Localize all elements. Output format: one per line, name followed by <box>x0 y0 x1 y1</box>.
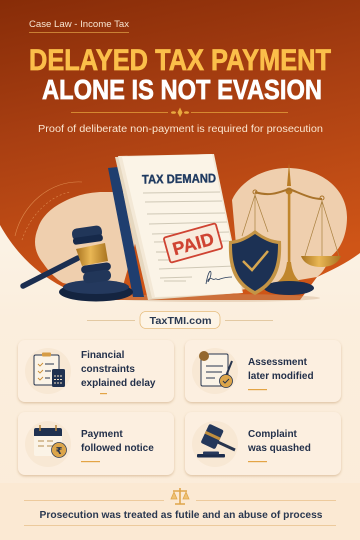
document heading: TAX DEMAND <box>142 171 216 187</box>
signature <box>206 271 232 284</box>
pole and top <box>287 163 291 186</box>
sound block <box>59 282 133 302</box>
illustration: gavel <box>23 225 133 302</box>
background: beige blob behind scales <box>232 168 347 290</box>
illustration: scales <box>242 163 341 295</box>
card: financial constraints <box>18 340 174 402</box>
card: payment followed notice: Payment <box>81 429 123 440</box>
ornament divider <box>71 108 288 117</box>
illustration: document stack <box>108 154 320 302</box>
navy folder <box>108 167 144 297</box>
icon: calendar and rupee coin: ₹ <box>56 446 63 457</box>
card: complaint was quashed: Complaint <box>248 429 298 440</box>
chains <box>242 195 339 256</box>
head <box>71 225 103 241</box>
card: financial constraints: constraints <box>81 364 135 375</box>
footer band <box>0 483 360 540</box>
icon: calendar and rupee coin <box>34 425 66 458</box>
beam <box>255 189 322 199</box>
stamp: paid <box>163 223 223 263</box>
icon: clipboard and calculator <box>34 352 65 387</box>
card: assessment later modified: Assessment <box>248 357 308 368</box>
card: complaint was quashed: was quashed <box>247 443 311 454</box>
card: payment followed notice <box>18 412 174 475</box>
document lines <box>143 192 235 281</box>
base <box>276 262 302 283</box>
eyebrow: case law <box>29 19 129 33</box>
subtitle: Proof of deliberate non-payment is required for prosecution <box>38 124 323 135</box>
icon: small gavel <box>197 424 235 458</box>
decoration: dashed arcs <box>15 182 82 240</box>
conclusion text: Prosecution was treated as futile and an abuse of process <box>40 510 323 521</box>
back pages <box>115 155 240 300</box>
card: assessment later modified: later modified <box>248 371 314 382</box>
right pan <box>301 256 341 267</box>
card: financial constraints: Financial <box>81 350 125 361</box>
eyebrow: case law: Case Law - Income Tax <box>29 19 129 29</box>
card: payment followed notice: followed notice <box>81 443 154 454</box>
card: complaint was quashed <box>185 412 341 475</box>
handle <box>23 258 78 286</box>
brand badge: TaxTMI.com <box>150 315 212 327</box>
card: financial constraints: explained delay <box>81 378 156 389</box>
card: assessment later modified <box>185 340 341 402</box>
brand badge <box>87 312 273 328</box>
icon: document and seal <box>199 351 232 388</box>
front page <box>122 154 242 297</box>
title <box>29 44 331 105</box>
illustration: shield with check <box>229 230 281 295</box>
background: cream lower area <box>0 225 360 540</box>
icon: scales <box>171 488 189 504</box>
background: orange header <box>0 0 360 300</box>
background: beige blob behind gavel <box>35 192 150 296</box>
stamp: paid: PAID <box>170 229 216 259</box>
